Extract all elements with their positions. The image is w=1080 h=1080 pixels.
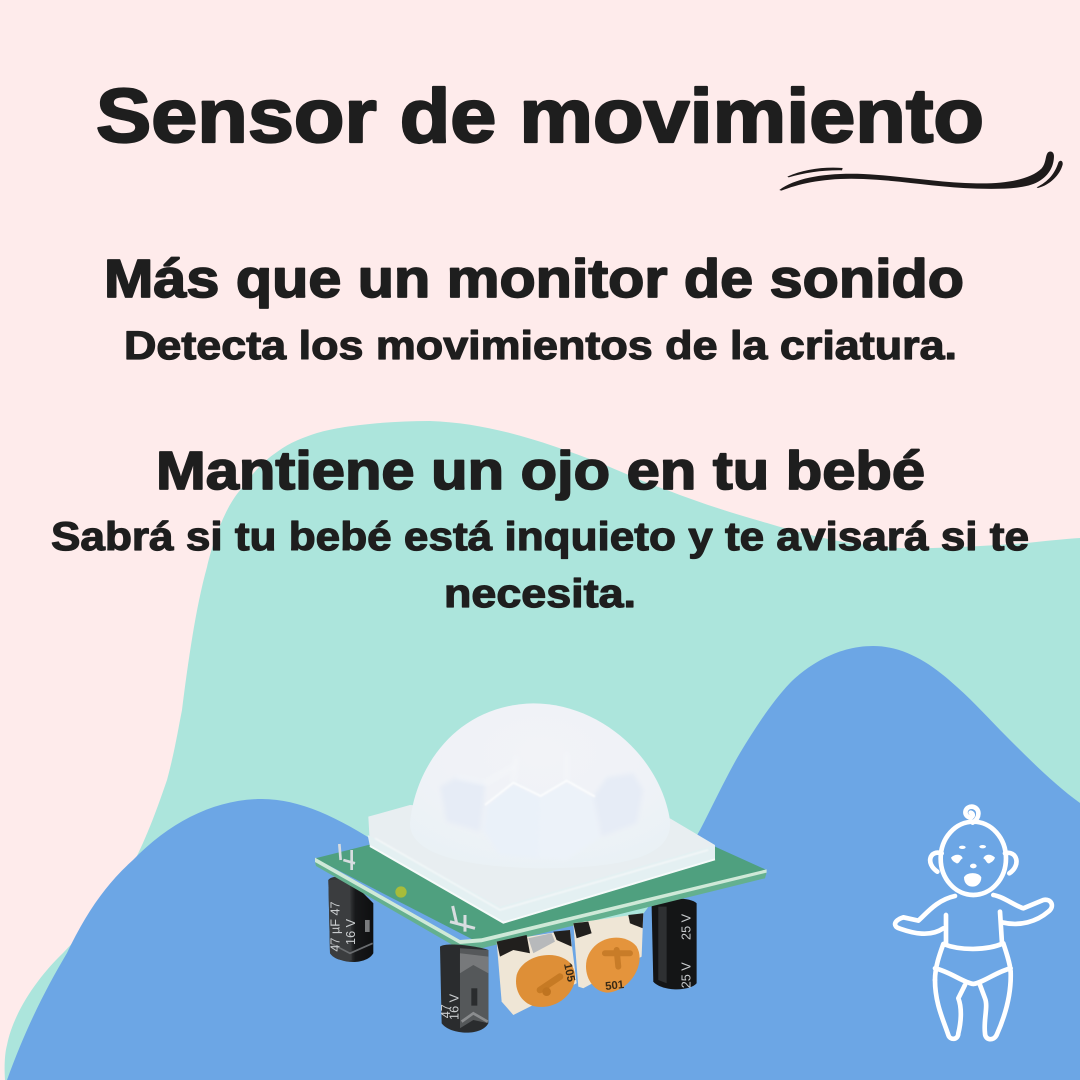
left trimmer potentiometer [497,930,577,1015]
front capacitor: 47 [439,1004,453,1018]
title: Sensor de movimiento [96,74,984,159]
baby arms [895,895,1052,934]
text: detecta movimientos: Detecta los movimientos de la criatura. [124,324,957,368]
baby face [951,845,995,887]
right trimmer potentiometer: 501 [605,979,625,993]
icon: baby outline [895,807,1052,1039]
heading: monitor de sonido: Más que un monitor de sonido [104,249,964,309]
right capacitor: 25 V [680,913,694,940]
right capacitor: 25 V [680,962,694,988]
front capacitor [439,945,488,1033]
blue foreground hills [7,646,1080,1080]
baby curl [965,807,978,823]
dome lens [410,703,670,868]
dome base [368,805,715,923]
sensor circuit board [315,803,767,949]
decorative underline swoosh [779,151,1063,191]
baby ears [930,853,1016,873]
right capacitor [652,899,697,989]
baby torso [946,912,1002,944]
left trimmer potentiometer: 105 [561,962,577,983]
front capacitor: 16 V [447,993,461,1020]
teal background blob [5,421,1080,1080]
left capacitor: 47 µF 47 [328,901,342,952]
baby legs [935,972,1011,1039]
left capacitor [328,877,373,962]
heading: ojo en tu bebé: Mantiene un ojo en tu bebé [156,441,925,501]
baby head [941,822,1006,895]
icon: PIR motion sensor module [315,703,767,1033]
left capacitor: 16 V [344,918,358,945]
text: sabrá si tu bebé, line 2: necesita. [444,572,636,616]
right trimmer potentiometer [573,913,643,993]
baby diaper [935,943,1011,984]
text: sabrá si tu bebé, line 1: Sabrá si tu bebé está inquieto y te avisará si te [51,515,1029,559]
